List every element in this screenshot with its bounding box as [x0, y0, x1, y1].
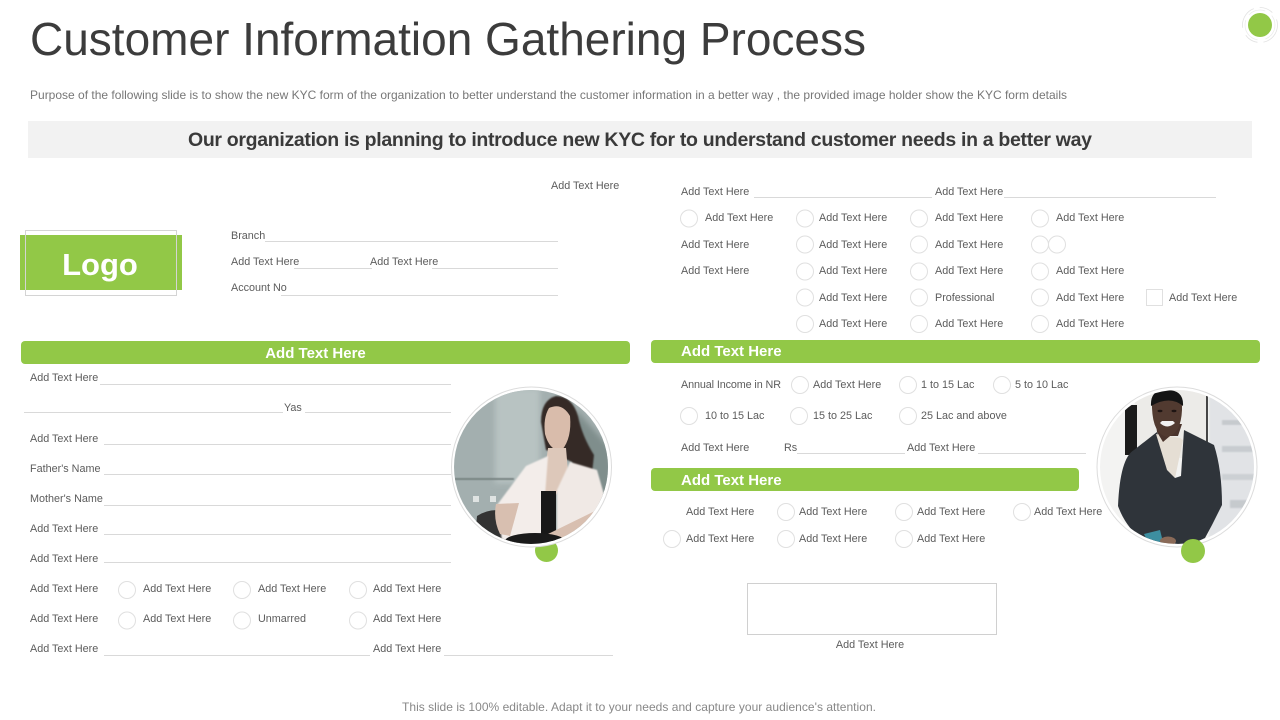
option row 2: Add Text Here: [799, 533, 867, 545]
radio row 1: Add Text Here: [143, 583, 211, 595]
amount row: Rs: [784, 442, 798, 454]
radio row 1: [30, 582, 441, 598]
section header bar: [651, 468, 1079, 491]
option row 1: Add Text Here: [799, 506, 867, 518]
annual income row: 5 to 10 Lac: [1015, 379, 1069, 391]
logo: Logo: [62, 247, 138, 282]
title: Customer Information Gathering Process: [30, 13, 866, 65]
section header bar: Add Text Here: [265, 345, 366, 362]
annual income row: 1 to 15 Lac: [921, 379, 975, 391]
amount row: Add Text Here: [907, 442, 975, 454]
last field row: Add Text Here: [373, 643, 441, 655]
option row 4: [796, 289, 1237, 306]
section header bar: Add Text Here: [681, 343, 782, 360]
panel: lower options and signature: [651, 468, 1102, 651]
photo: woman in circular frame: [450, 387, 612, 562]
icon: green dot on man photo: [1181, 539, 1205, 563]
amount row: Add Text Here: [681, 442, 749, 454]
option row 1: Add Text Here: [917, 506, 985, 518]
paired text fields: Add Text Here: [231, 256, 299, 268]
option row 2: Add Text Here: [917, 533, 985, 545]
amount row: [681, 442, 1086, 454]
option row 2: Add Text Here: [935, 239, 1003, 251]
income range row: 10 to 15 Lac: [705, 410, 765, 422]
signature box: Add Text Here: [836, 639, 904, 651]
radio row 2: Add Text Here: [30, 613, 98, 625]
two line fields: [681, 186, 1216, 198]
option row 2: [681, 236, 1066, 253]
annual income row: Annual Income in NR: [681, 379, 781, 391]
radio row 1: Add Text Here: [30, 583, 98, 595]
last field row: [30, 643, 613, 656]
option row 5: [796, 316, 1124, 332]
paired text fields: [231, 256, 558, 268]
last field row: Add Text Here: [30, 643, 98, 655]
option row 1: Add Text Here: [935, 212, 1003, 224]
option row 5: Add Text Here: [819, 318, 887, 330]
field row 7: Add Text Here: [30, 553, 98, 565]
income range row: 15 to 25 Lac: [813, 410, 873, 422]
banner: [28, 121, 1252, 158]
radio row 2: Unmarred: [258, 613, 306, 625]
option row 1: Add Text Here: [1034, 506, 1102, 518]
panel: annual income form: [651, 340, 1260, 454]
top right label: Add Text Here: [551, 180, 619, 192]
section header bar: Add Text Here: [681, 472, 782, 489]
option row 3: Add Text Here: [681, 265, 749, 277]
option row 1: [680, 210, 1124, 227]
subtitle text: Purpose of the following slide is to show the new KYC form of the organization to better understand the customer information in a better way , the provided image holder show the KYC form details: [30, 88, 1067, 102]
option row 2: Add Text Here: [686, 533, 754, 545]
option row 1: Add Text Here: [1056, 212, 1124, 224]
banner: Our organization is planning to introduce new KYC for to understand customer needs in a better way: [188, 129, 1092, 151]
mother's name field: Mother's Name: [30, 493, 103, 505]
panel: left personal details form: [21, 341, 630, 656]
option row 2: Add Text Here: [819, 239, 887, 251]
panel: top right options: [680, 186, 1237, 332]
radio row 2: [30, 612, 441, 629]
option row 2: Add Text Here: [681, 239, 749, 251]
income range row: 25 Lac and above: [921, 410, 1007, 422]
option row 5: Add Text Here: [935, 318, 1003, 330]
father's name field: Father's Name: [30, 463, 100, 475]
radio row 1: Add Text Here: [373, 583, 441, 595]
logo: [20, 230, 182, 296]
option row 1: Add Text Here: [686, 506, 754, 518]
two line fields: Add Text Here: [935, 186, 1003, 198]
field row 6: Add Text Here: [30, 523, 98, 535]
section header bar: [651, 340, 1260, 363]
radio row 2: Add Text Here: [143, 613, 211, 625]
option row 2: [664, 530, 985, 548]
radio row 1: Add Text Here: [258, 583, 326, 595]
option row 1: Add Text Here: [705, 212, 773, 224]
option row 3: Add Text Here: [819, 265, 887, 277]
option row 3: Add Text Here: [935, 265, 1003, 277]
option row 5: Add Text Here: [1056, 318, 1124, 330]
option row 3: Add Text Here: [1056, 265, 1124, 277]
option row 1: Add Text Here: [819, 212, 887, 224]
option row 4: Add Text Here: [819, 292, 887, 304]
footer note: This slide is 100% editable. Adapt it to your needs and capture your audience's attention.: [402, 700, 876, 714]
option row 1: [686, 504, 1102, 520]
option row 3: [681, 263, 1124, 280]
panel: logo and branch details: [20, 180, 619, 296]
annual income row: [681, 376, 1069, 394]
field row 2: Yas: [284, 402, 302, 414]
field row 3: Add Text Here: [30, 433, 98, 445]
paired text fields: Add Text Here: [370, 256, 438, 268]
annual income row: Add Text Here: [813, 379, 881, 391]
account number field: Account No: [231, 282, 287, 294]
radio row 2: Add Text Here: [373, 613, 441, 625]
option row 4: Add Text Here: [1056, 292, 1124, 304]
photo: man in circular frame: [1096, 387, 1259, 548]
income range row: [680, 408, 1007, 424]
option row 4: Add Text Here: [1169, 292, 1237, 304]
icon: green circle with rings: [1242, 8, 1278, 42]
section header bar: [21, 341, 630, 364]
option row 4: Professional: [935, 292, 994, 304]
field row 1: Add Text Here: [30, 372, 98, 384]
two line fields: Add Text Here: [681, 186, 749, 198]
branch field: Branch: [231, 230, 265, 242]
signature box: [748, 584, 996, 651]
